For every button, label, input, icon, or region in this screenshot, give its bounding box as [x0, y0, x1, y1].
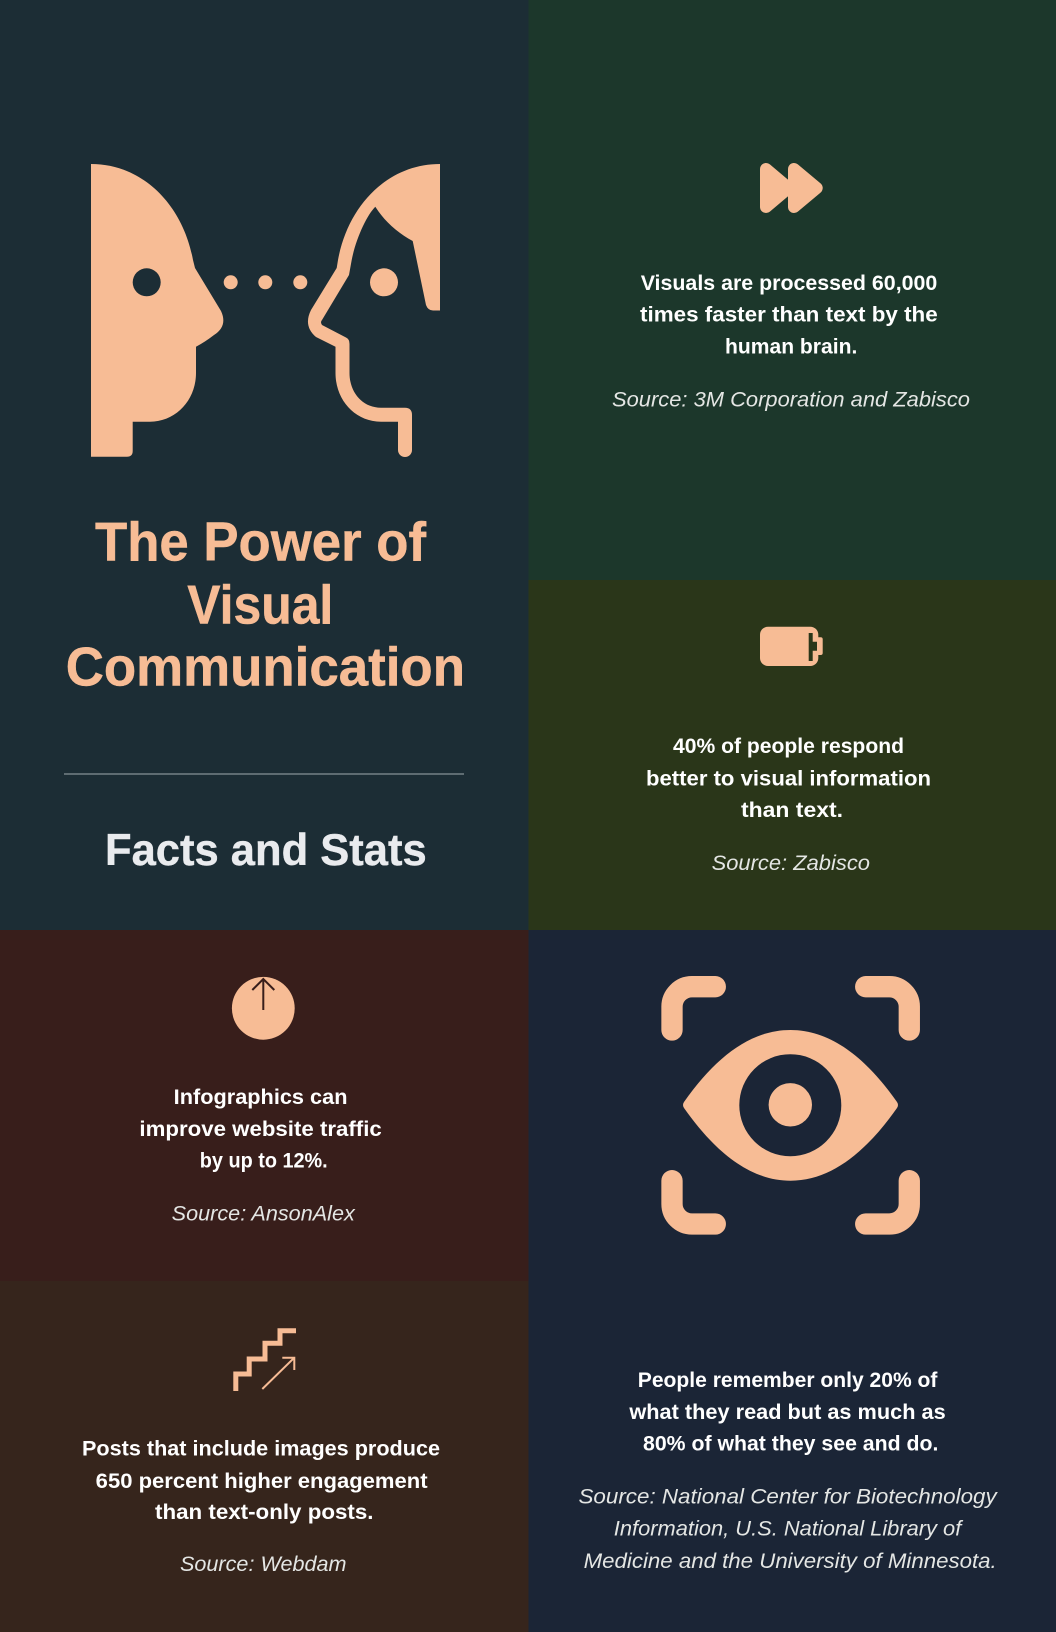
- icon: eye in frame: [672, 987, 909, 1224]
- icon: two faces: [91, 164, 440, 457]
- statement text: [646, 734, 931, 822]
- statement text: what they read but as much as: [628, 1400, 946, 1424]
- source text: Source: 3M Corporation and Zabisco: [612, 389, 970, 412]
- statement text: 650 percent higher engagement: [96, 1469, 428, 1493]
- statement text: [640, 271, 938, 358]
- panel: website traffic: [0, 930, 528, 1281]
- statement text: times faster than text by the: [640, 303, 938, 327]
- source text: Source: AnsonAlex: [172, 1202, 356, 1226]
- icon: stairs with arrow: [236, 1331, 296, 1391]
- title text: The Power of: [95, 511, 427, 573]
- source text: Source: Webdam: [180, 1553, 346, 1576]
- source text: Source: Zabisco: [712, 852, 870, 875]
- icon: battery: [760, 627, 823, 666]
- title text: Visual: [187, 573, 333, 635]
- source text: [578, 1485, 998, 1573]
- statement text: Visuals are processed 60,000: [641, 271, 937, 295]
- source text: Medicine and the University of Minnesota.: [584, 1550, 997, 1573]
- icon: up arrow circle: [232, 977, 295, 1040]
- statement text: than text.: [741, 798, 843, 822]
- source text: Source: National Center for Biotechnology: [578, 1485, 998, 1508]
- statement text: than text-only posts.: [155, 1500, 374, 1524]
- source text: Information, U.S. National Library of: [614, 1518, 964, 1541]
- panel: title: [0, 0, 528, 930]
- panel: people respond to visuals: [528, 580, 1056, 930]
- statement text: 40% of people respond: [673, 734, 904, 758]
- statement text: People remember only 20% of: [638, 1368, 938, 1392]
- icon: fast forward: [766, 169, 817, 207]
- statement text: Infographics can: [174, 1085, 348, 1109]
- panel: visuals processed faster: [528, 0, 1056, 580]
- statement text: improve website traffic: [139, 1117, 382, 1141]
- statement text: Posts that include images produce: [82, 1436, 440, 1460]
- statement text: [628, 1368, 946, 1455]
- statement text: by up to 12%.: [200, 1148, 328, 1172]
- subtitle: Facts and Stats: [105, 826, 427, 875]
- statement text: [82, 1436, 440, 1524]
- panel: post engagement: [0, 1281, 528, 1632]
- title text: [66, 511, 465, 698]
- title text: Communication: [66, 636, 465, 698]
- statement text: 80% of what they see and do.: [643, 1431, 938, 1455]
- statement text: [139, 1085, 382, 1172]
- statement text: better to visual information: [646, 766, 931, 790]
- panel: memory: [528, 930, 1056, 1632]
- statement text: human brain.: [725, 334, 857, 358]
